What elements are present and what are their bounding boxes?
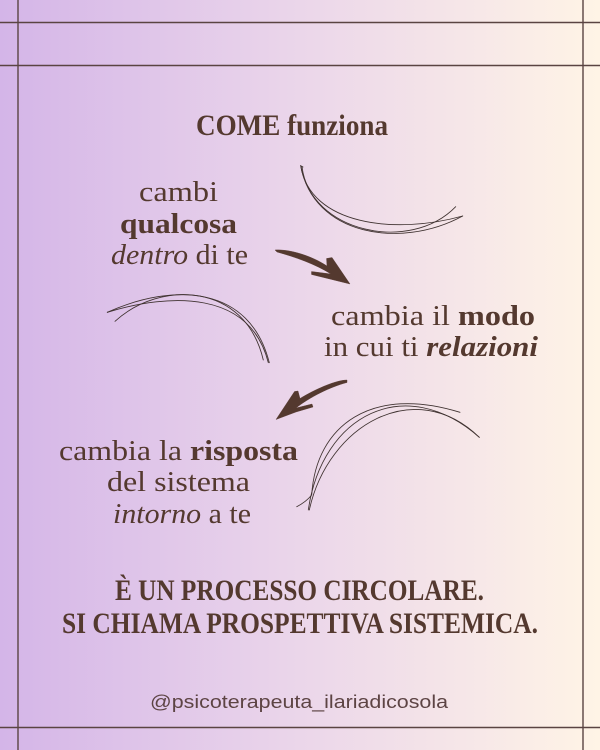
step 1 text: cambi qualcosa dentro di te: qualcosa bbox=[120, 208, 238, 240]
step 3 text: cambia la risposta del sistema intorno a te: cambia la risposta bbox=[59, 435, 299, 467]
decorative curve: top right bbox=[301, 166, 463, 233]
conclusion text: È UN PROCESSO CIRCOLARE. bbox=[115, 574, 484, 607]
step 1 text: cambi qualcosa dentro di te: cambi bbox=[139, 176, 218, 208]
step 3 text: cambia la risposta del sistema intorno a te: intorno a te bbox=[113, 498, 251, 530]
decorative curve: middle left bbox=[107, 295, 269, 363]
step 1 text: cambi qualcosa dentro di te bbox=[111, 176, 248, 271]
heading: COME funziona: COME funziona bbox=[196, 109, 388, 142]
arrow: from step 2 to step 3 bbox=[276, 380, 347, 420]
step 3 text: cambia la risposta del sistema intorno a te: del sistema bbox=[107, 466, 250, 498]
step 2 text: cambia il modo in cui ti relazioni: cambia il modo bbox=[331, 300, 535, 332]
step 1 text: cambi qualcosa dentro di te: dentro di te bbox=[111, 239, 248, 271]
step 2 text: cambia il modo in cui ti relazioni bbox=[324, 300, 538, 363]
step 2 text: cambia il modo in cui ti relazioni: in cui ti relazioni bbox=[324, 331, 538, 363]
decorative curve: bottom right bbox=[297, 404, 479, 510]
handle: social account: @psicoterapeuta_ilariadicosola bbox=[150, 692, 449, 713]
arrow: from step 1 to step 2 bbox=[275, 250, 350, 284]
step 3 text: cambia la risposta del sistema intorno a te bbox=[59, 435, 299, 530]
conclusion text bbox=[62, 574, 538, 640]
